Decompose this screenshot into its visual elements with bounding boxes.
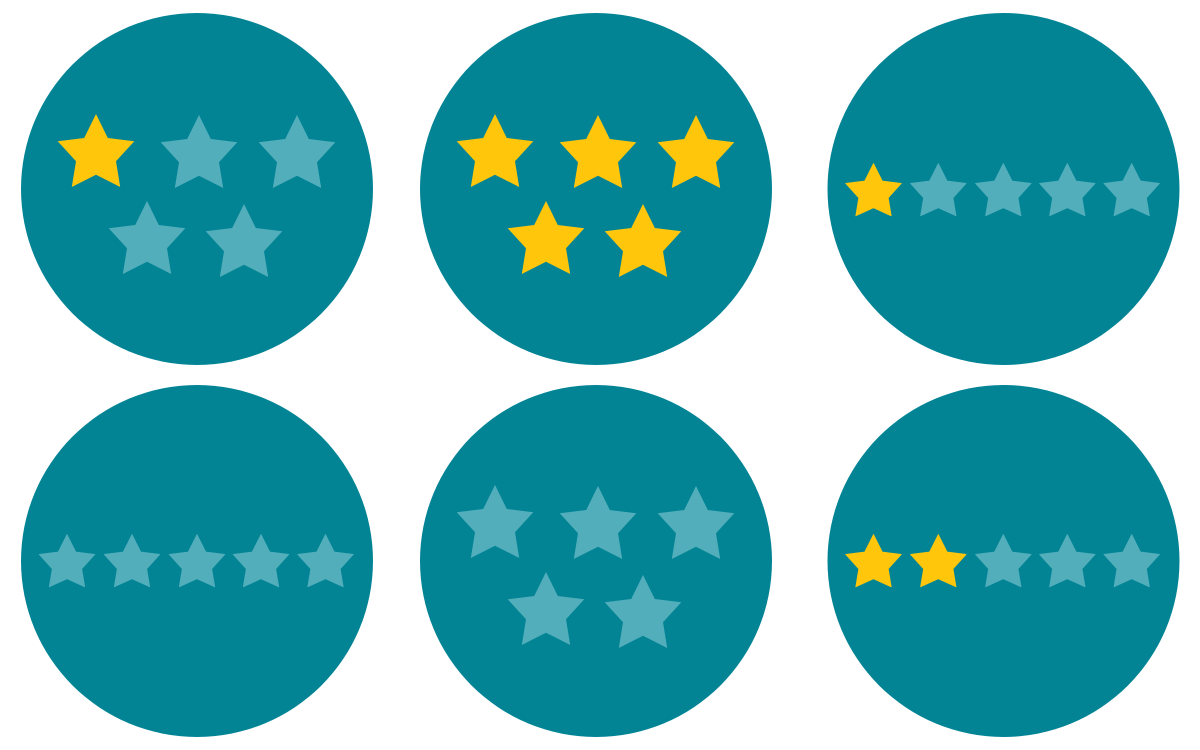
stars: five gold <box>457 114 734 277</box>
badge: five of five stars, clustered <box>420 13 772 365</box>
badge: zero of five stars, in a row <box>21 385 373 737</box>
badge: one of five stars, clustered <box>21 13 373 365</box>
circle background <box>21 385 373 737</box>
circle background <box>420 13 772 365</box>
stars: five pale <box>39 534 353 587</box>
badge: one of five stars, in a row <box>828 13 1180 365</box>
circle background <box>828 385 1180 737</box>
circle background <box>828 13 1180 365</box>
badge: two of five stars, in a row <box>828 385 1180 737</box>
stars: one gold, four pale <box>58 114 335 277</box>
stars: one gold, four pale <box>846 164 1159 216</box>
circle background <box>21 13 373 365</box>
badge: zero of five stars, clustered <box>420 385 772 737</box>
stars: five pale <box>457 485 734 648</box>
circle background <box>420 385 772 737</box>
stars: two gold, three pale <box>846 534 1159 587</box>
